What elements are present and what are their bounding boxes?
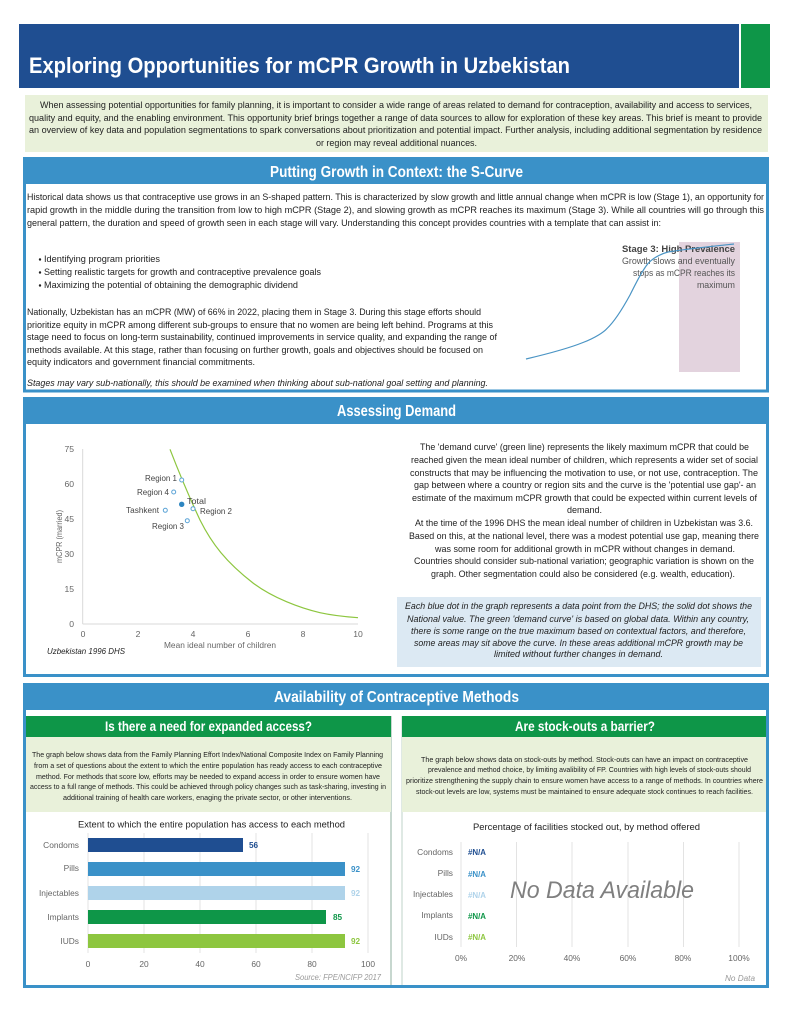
x axis title: Mean ideal number of children [164,640,276,650]
stage 3 label: Stage 3: High Prevalence [622,243,735,254]
x axis tick labels [81,629,363,639]
value labels: 56 [249,841,259,850]
intro text block: When assessing potential opportunities for family planning, it is important to consider a wide range of areas related to demand for contraception, availability and access to services, [40,99,752,110]
data point labels: Tashkent [126,505,160,515]
national context text: prioritize equity in mCPR among different sub-groups to ensure that no women are being left behind. Programs at this [27,319,493,330]
heading: S-curve: Putting Growth in Context: the S-Curve [270,164,523,181]
axis labels: 100% [728,953,750,963]
intro text block [25,95,768,152]
category labels: Condoms [417,847,453,857]
chart: S-curve with stage 3 highlight [526,242,740,372]
panel: stock-outs [402,716,766,983]
heading: assessing demand: Assessing Demand [337,403,456,420]
value labels [249,841,361,946]
value labels: #N/A [468,870,486,879]
axis labels: 20% [509,953,526,963]
expanded access text [30,750,386,802]
demand curve explanation text: estimate of the maximum mCPR growth that could be expected within current levels of [412,492,757,503]
category labels: IUDs [434,932,453,942]
y axis tick labels: 60 [64,479,74,489]
panel: expanded access [26,716,391,982]
demand curve explanation text [409,441,759,579]
national context text: methods available. At this stage, rather than focusing on further growth, goals and objectives should be focused on [27,344,483,355]
demand curve explanation text: Countries should consider sub-national variation; geographic variation is shown on the [414,555,754,566]
y axis tick labels: 30 [64,549,74,559]
demand curve explanation text: reached given the mean ideal number of children, which represents a wider set of social [411,454,758,465]
axis labels: 60 [251,959,261,969]
axis labels: 0 [86,959,91,969]
category labels: Implants [47,912,79,922]
axis labels [455,953,750,963]
y axis tick labels [64,444,74,629]
value labels: 92 [351,937,361,946]
stage 3 label: maximum [697,279,735,290]
x axis tick labels: 4 [191,629,196,639]
data point labels: Total [187,496,206,506]
category labels [39,840,79,946]
bullet list: Identifying program priorities [44,253,160,264]
stock-outs text [406,755,763,796]
data point labels: Region 1 [145,473,177,483]
callout: how to read the graph: Each blue dot in the graph represents a data point from the DHS; the solid dot shows the [405,600,752,611]
stage 3 label: Growth slows and eventually [622,255,735,266]
bars [88,838,345,948]
panel: assessing demand section [23,397,769,676]
bullet list: Setting realistic targets for growth and contraceptive prevalence goals [44,266,321,277]
value labels: #N/A [468,848,486,857]
data point labels: Region 3 [152,521,184,531]
category labels: Injectables [413,889,453,899]
data point labels: Region 2 [200,506,232,516]
demand curve explanation text: was some room for additional growth in mCPR without changes in demand. [434,543,735,554]
value labels [468,848,486,942]
stock-outs text: The graph below shows data on stock-outs by method. Stock-outs can have an impact on contraceptive [421,755,748,764]
stock-outs text: prioritize strengthening the supply chain to ensure women have access to a range of methods. In countries where [406,776,763,785]
axis labels: 80 [307,959,317,969]
header banner [19,24,770,88]
intro text block: or region may reveal additional nuances. [316,137,477,148]
axis labels: 0% [455,953,468,963]
callout: how to read the graph: some areas may sit above the curve. In these areas additional mCPR growth may be [414,637,743,648]
category labels: Pills [438,868,453,878]
value labels: 92 [351,889,361,898]
stage 3 label [622,243,735,290]
italic note: Stages may vary sub-nationally, this should be examined when thinking about sub-national goal setting and planning. [27,377,488,388]
panel: availability of contraceptive methods section [23,683,769,986]
panel: S-curve section [23,157,769,391]
S-curve line [526,244,734,359]
expanded access text: The graph below shows data from the Family Planning Effort Index/National Composite Index on Family Planning [32,750,383,759]
bar chart: access by method [39,820,382,982]
S-curve intro text: rapid growth in the middle during the transition from low to high mCPR (Stage 2), and slowing growth as mCPR reaches its maximum (Stage 3). While all countries will go through this [27,204,764,215]
x axis tick labels: 8 [301,629,306,639]
axis labels [86,959,375,969]
category labels: IUDs [60,936,79,946]
data point labels [126,473,232,531]
callout: how to read the graph: limited without further changes in demand. [494,648,663,659]
stock-outs text: prevalence and method choice, by limiting avalibility of FP. Countries with high levels of stock-outs should [428,765,751,774]
stage 3 label: stops as mCPR reaches its [633,267,735,278]
category labels: Injectables [39,888,79,898]
bullet list [39,253,321,290]
national context text: equity indicators and government financial commitments. [27,356,255,367]
subheading: expanded access: Is there a need for expanded access? [105,718,312,734]
category labels: Pills [64,863,79,873]
S-curve intro text: Historical data shows us that contraceptive use grows in an S-shaped pattern. This is characterized by slow growth and little annual change when mCPR is low (Stage 1), an opportunity for [27,191,764,202]
S-curve intro text: general pattern, the duration and speed of growth seen in each stage will vary. Understanding this concept provides countries with a template that can assist in: [27,217,661,228]
demand curve explanation text: constructs that may be influencing the motivation to use, or not use, contraception. The [410,467,758,478]
source note: Uzbekistan 1996 DHS [47,647,126,656]
chart title: Extent to which the entire population has access to each method [78,820,345,830]
callout: how to read the graph [397,597,761,667]
national context text: stage need to focus on long-term sustainability, continued improvements in service quality, and expanding the range of [27,331,497,342]
y axis tick labels: 0 [69,619,74,629]
x axis tick labels: 0 [81,629,86,639]
category labels: Implants [421,910,453,920]
x axis tick labels: 2 [136,629,141,639]
value labels: #N/A [468,891,486,900]
axis labels: 20 [139,959,149,969]
axis labels: 60% [620,953,637,963]
S-curve intro text [27,191,764,228]
demand curve explanation text: graph. Other segmentation could also be considered (e.g. wealth, education). [431,568,735,579]
national context text: Nationally, Uzbekistan has an mCPR (MW) of 66% in 2022, placing them in Stage 3. During this stage efforts should [27,306,481,317]
expanded access text: method. For methods that score low, efforts may be needed to expand access in order to ensure women have [36,772,380,781]
data point labels: Region 4 [137,487,169,497]
category labels [413,847,453,942]
axis labels: 100 [361,959,375,969]
callout: how to read the graph: there is some range on the true maximum based on contextual factors, and therefore, [411,625,746,636]
demand curve explanation text: Based on this, at the national level, there was a modest potential use gap, meaning there [409,530,759,541]
chart: demand curve scatter plot [47,444,363,656]
demand curve line [170,449,358,618]
expanded access text: from a set of questions about the extent to which the entire population has ready access to each contraceptive [34,761,382,770]
axis labels: 40% [564,953,581,963]
stock-outs text: stock-out levels are low, systems must be maintained to ensure adequate stock continues to reach facilities. [416,787,753,796]
bar chart: stock-outs by method, no data [413,822,756,983]
intro text block: an overview of key data and population segmentations to spark conversations about prioritization and potential impact. Further analysis, including additional segmentation by residence [29,124,762,135]
y axis tick labels: 75 [64,444,74,454]
callout: how to read the graph: National value. The green 'demand curve' is based on global data. Within any country, [407,613,749,624]
y axis tick labels: 15 [64,584,74,594]
demand curve explanation text: demand. [567,504,602,515]
intro text block: quality and equity, and the enabling environment. This opportunity brief brings together a range of data sources to allow for exploration of these key areas. This brief is meant to provide [29,112,762,123]
axis labels: 80% [675,953,692,963]
axis labels: 40 [195,959,205,969]
value labels: 92 [351,865,361,874]
subheading: stock-outs: Are stock-outs a barrier? [515,718,655,734]
x axis tick labels: 10 [353,629,363,639]
value labels: #N/A [468,933,486,942]
demand curve explanation text: At the time of the 1996 DHS the mean ideal number of children in Uzbekistan was 3.6. [415,517,753,528]
x axis tick labels: 6 [246,629,251,639]
heading: availability: Availability of Contraceptive Methods [274,689,519,706]
demand curve explanation text: The 'demand curve' (green line) represents the likely maximum mCPR that could be [420,441,749,452]
expanded access text: access to a full range of methods. This could be achieved through policy changes such as task-sharing, investing in [30,782,386,791]
national context text [27,306,497,367]
data points [163,478,195,523]
expanded access text: additional training of health care workers, enaging the private sector, or other interventions. [63,793,352,802]
demand curve explanation text: gap between where a country or region sits and the curve is the 'potential use gap'- an [414,479,756,490]
y axis tick labels: 45 [64,514,74,524]
bullet list: Maximizing the potential of obtaining the demographic dividend [44,279,298,290]
source note: No Data [725,974,756,983]
y axis title: mCPR (married) [54,510,64,563]
category labels: Condoms [43,840,79,850]
no data overlay: No Data Available [510,877,694,904]
source note: Source: FPE/NCIFP 2017 [295,973,382,982]
title: Exploring Opportunities for mCPR Growth in Uzbekistan [29,53,570,78]
value labels: #N/A [468,912,486,921]
value labels: 85 [333,913,343,922]
chart title: Percentage of facilities stocked out, by method offered [473,822,700,832]
